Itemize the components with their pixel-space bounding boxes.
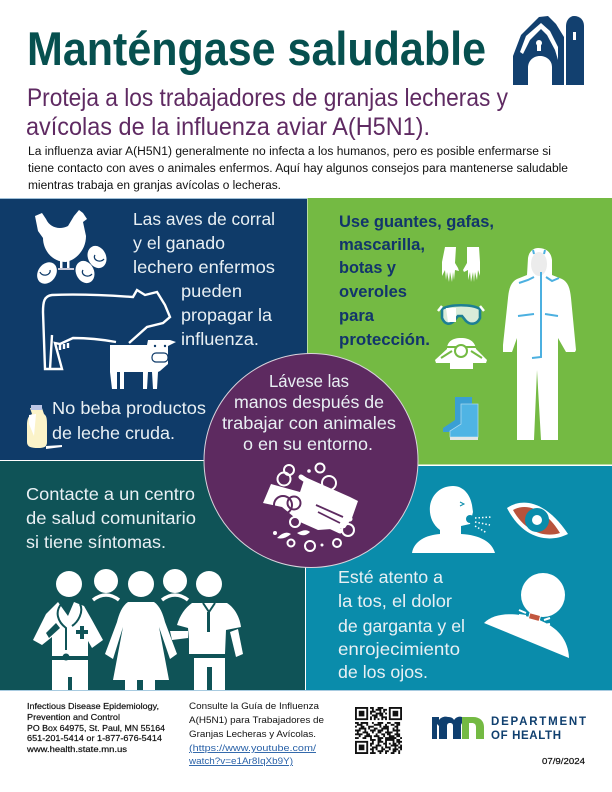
text: protective gear: Use guantes, gafas, (339, 212, 494, 231)
footer: video guide (188, 701, 324, 767)
text: protective gear: protección. (339, 330, 430, 349)
text: wash hands (222, 371, 396, 454)
footer: address: Prevention and Control (27, 712, 120, 722)
text: protective gear: para (339, 306, 375, 325)
text: watch for symptoms: de garganta y el (338, 616, 465, 636)
icon: sore throat (484, 573, 569, 658)
text: sick poultry and cattle: pueden (181, 281, 242, 301)
text: watch for symptoms: de los ojos. (338, 662, 428, 682)
intro text: mientras trabaja en granjas avícolas o lecheras. (28, 180, 281, 192)
text: watch for symptoms: Esté atento a (338, 567, 443, 587)
text: protective gear: botas y (339, 258, 397, 277)
icon: health workers (33, 569, 243, 690)
footer: video guide: (https://www.youtube.com/ (189, 743, 316, 754)
text: contact health center (26, 484, 196, 552)
footer: video guide: watch?v=e1Ar8IqXb9Y) (188, 756, 293, 767)
text: wash hands: o en su entorno. (243, 434, 373, 454)
text: sick poultry and cattle: y el ganado (133, 233, 225, 253)
icon: goggles (438, 305, 484, 324)
panel: contact a health center (0, 461, 305, 690)
subtitle: Proteja a los trabajadores de granjas lecheras y (27, 84, 508, 112)
footer: video guide: Consulte la Guía de Influenza (189, 701, 320, 712)
text: sick poultry and cattle: Las aves de corral (133, 209, 275, 229)
panel: hand washing circle (204, 354, 418, 568)
icon: coughing person (412, 486, 495, 553)
text: protective gear (339, 212, 494, 349)
footer: address (26, 701, 165, 754)
panel: sick animals (0, 198, 307, 460)
text: protective gear: mascarilla, (339, 235, 425, 254)
text: watch for symptoms: enrojecimiento (338, 639, 460, 659)
icon: face mask (435, 338, 487, 369)
text: wash hands: trabajar con animales (222, 413, 396, 433)
subtitle (26, 84, 508, 141)
text: wash hands: Lávese las (269, 371, 349, 391)
panel: protective equipment (308, 198, 612, 464)
footer: address: Infectious Disease Epidemiology, (27, 701, 159, 711)
intro text: tiene contacto con aves o animales enfermos. Aquí hay algunos consejos para mantenerse saludable (28, 163, 568, 175)
footer: video guide: Granjas Lecheras y Avícolas. (189, 729, 316, 740)
intro text: La influenza aviar A(H5N1) generalmente no infecta a los humanos, pero es posible enfermarse si (28, 146, 551, 158)
icon: hen and chicks (33, 210, 110, 288)
text: watch for symptoms (338, 567, 465, 682)
text: wash hands: manos después de (234, 392, 384, 412)
text: contact health center: si tiene síntomas. (26, 532, 166, 552)
footer: address: PO Box 64975, St. Paul, MN 55164 (27, 723, 165, 733)
text: raw milk warning: de leche cruda. (52, 423, 175, 443)
text: protective gear: overoles (339, 282, 407, 301)
logo: Minnesota Department of Health: OF HEALTH (491, 730, 561, 742)
footer: address: 651-201-5414 or 1-877-676-5414 (27, 733, 162, 743)
logo: Minnesota Department of Health (432, 716, 586, 742)
icon: milk bottle (27, 405, 62, 449)
text: raw milk warning: No beba productos (52, 398, 206, 418)
subtitle: avícolas de la influenza aviar A(H5N1). (26, 113, 430, 141)
footer: address: www.health.state.mn.us (26, 744, 127, 754)
footer: video guide: A(H5N1) para Trabajadores de (189, 715, 324, 726)
text: contact health center: de salud comunitario (26, 508, 196, 528)
text: contact health center: Contacte a un centro (26, 484, 195, 504)
icon: cow outline (43, 290, 170, 369)
text: sick poultry and cattle: propagar la (181, 305, 272, 325)
icon: boots (443, 397, 478, 440)
QR code (355, 707, 402, 754)
intro text (28, 146, 568, 192)
icon: gloves (442, 247, 480, 282)
icon: barn and silo (513, 16, 584, 85)
text: sick poultry and cattle (133, 209, 275, 349)
logo: Minnesota Department of Health: DEPARTMENT (491, 716, 586, 728)
text: sick poultry and cattle: influenza. (181, 329, 259, 349)
date: 07/9/2024 (542, 756, 585, 766)
text: watch for symptoms: la tos, el dolor (338, 591, 452, 611)
title: Manténgase saludable (27, 22, 486, 75)
icon: red eye (507, 503, 568, 538)
icon: coverall suit (503, 248, 576, 440)
panel: symptoms (0, 466, 612, 691)
text: sick poultry and cattle: lechero enfermos (133, 257, 275, 277)
icon: washing hands (263, 464, 358, 551)
icon: calf (110, 340, 176, 389)
text: raw milk warning (52, 398, 206, 443)
